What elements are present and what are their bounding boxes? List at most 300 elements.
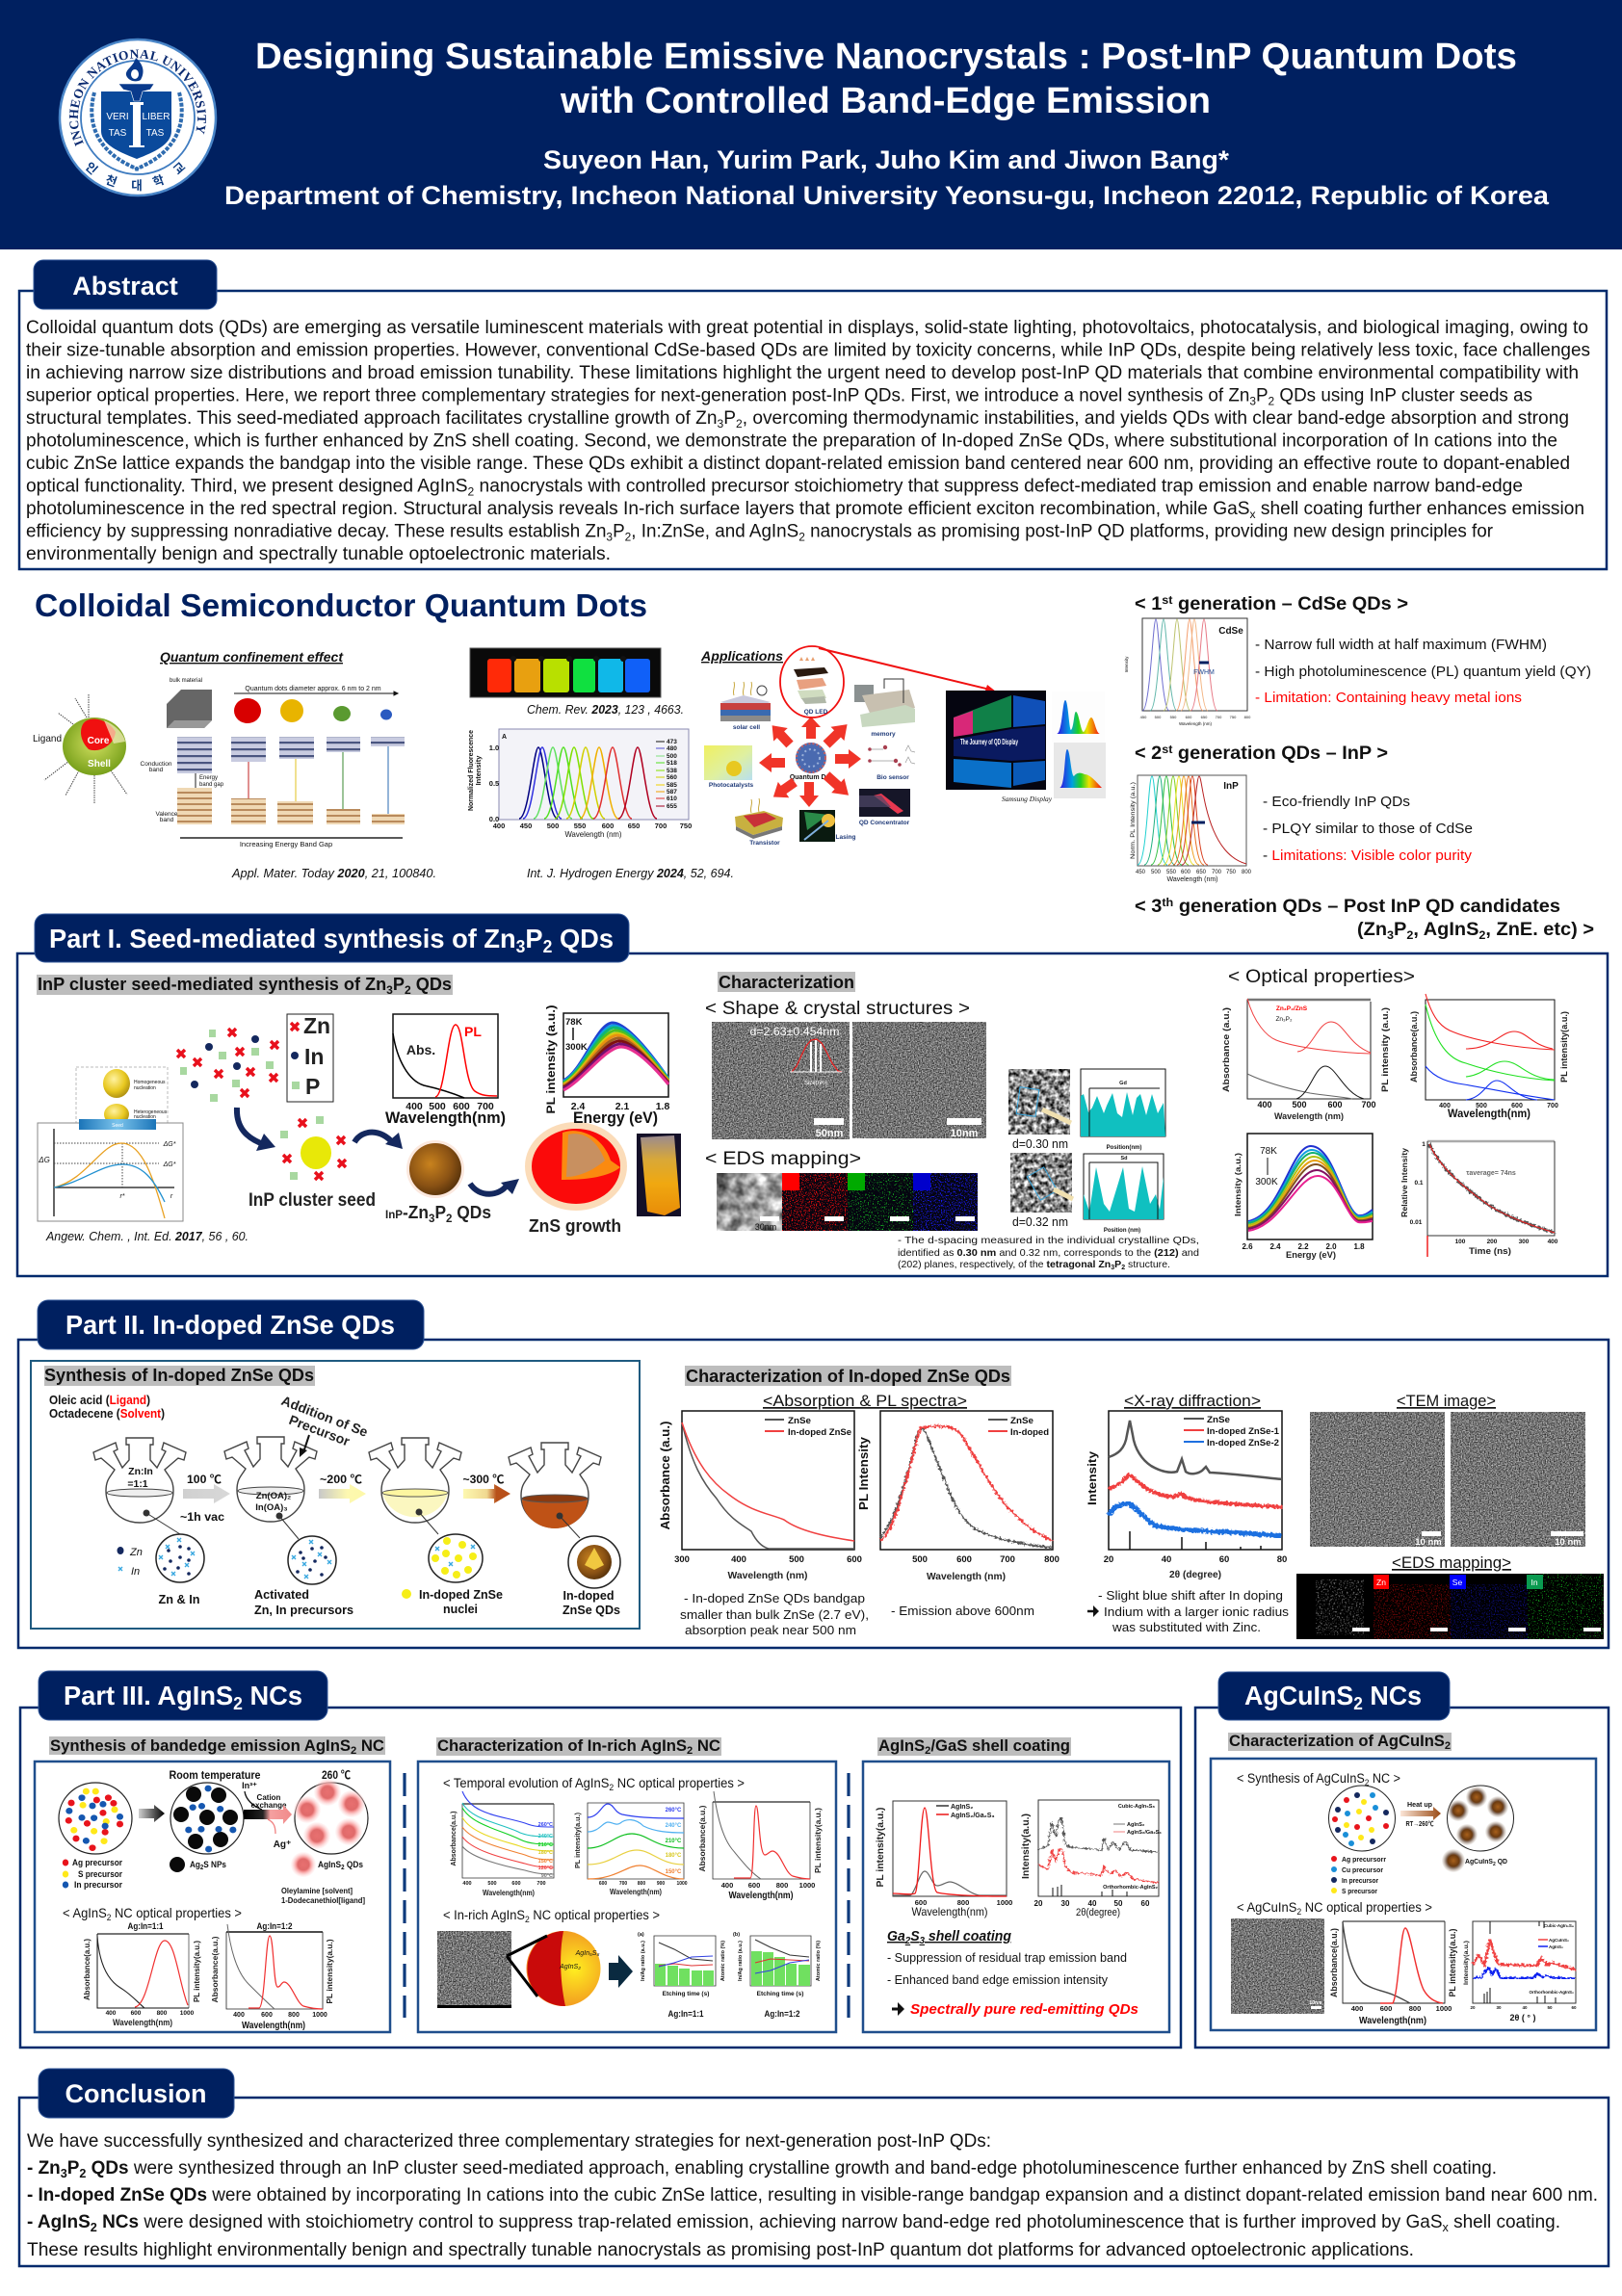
chart: normalized fluorescence spectra: 500 [547,822,559,830]
CdSe bullet points [1255,637,1591,706]
EDS maps [1296,1574,1604,1640]
chart: temporal absorbance: 210°C [538,1842,553,1848]
chart: normalized fluorescence spectra: 655 [667,803,677,810]
nucleation schematic [38,1067,183,1221]
application: QD concentrator: QD Concentrator [859,820,910,826]
chart: XRD [1086,1411,1287,1580]
optical properties heading: 2 [107,1913,111,1922]
In-rich heading: < In-rich AgInS [443,1908,529,1922]
d-spacing note: 2 [1121,1265,1125,1271]
chart: etching a: Atomic ratio (%) [720,1941,726,1981]
chart: AgInS2 abs and PL: PL intensity(a.u.) [813,1808,823,1873]
chart: XRD shell coating: Intensity(a.u.) [1021,1813,1032,1879]
chart: AgCuInS2 XRD: 40 [1522,2005,1528,2010]
conclusion heading: Conclusion [65,2079,206,2108]
abstract text: structural templates. This seed-mediated approach facilitates crystalline growth of Zn [26,408,712,429]
icon: university logo: 천 [104,173,118,190]
part III heading: NCs [243,1681,302,1710]
chart: absorption and PL [385,1014,506,1127]
chart: InP emission: InP [1223,781,1239,792]
2nd generation heading: < 2 [1135,744,1161,764]
chart: normalized fluorescence spectra: 585 [667,782,677,789]
panel: quantum dot generations [1124,593,1594,942]
chart: absorption and PL: 700 [477,1101,494,1112]
stage labels: Zn, In precursors [254,1604,353,1617]
AgInS2 QD circle: 260 ℃ [322,1768,351,1782]
panel: abstract [19,260,1607,569]
chart: temporal PL: Wavelength(nm) [610,1888,662,1896]
stage labels: nuclei [443,1603,478,1616]
chart: Zn3P2 absorption and PL: 500 [1292,1100,1307,1109]
chart: normalized fluorescence spectra: 0.0 [489,815,499,823]
EDS maps: 30nm [1352,1633,1370,1640]
chart: absorbance of ZnSe: Absorbance (a.u.) [659,1422,672,1529]
chart: Ag:In=1:1: PL intensity(a.u.) [192,1941,201,2002]
abstract heading: Abstract [72,272,178,300]
nucleation schematic: ΔG* [163,1161,176,1168]
3rd generation heading: (Zn [1357,920,1386,940]
synthesis heading: 3 [386,983,393,997]
chart: XRD shell coating: Orthorhombic-AgInS₂ [1103,1885,1159,1891]
chart: normalized fluorescence spectra: 450 [520,822,532,830]
chart: XRD shell coating [1021,1800,1162,1918]
chart: absorption and PL: Wavelength(nm) [385,1109,506,1127]
XRD caption [1087,1589,1289,1634]
chart: temporal PL: 1000 [676,1881,688,1887]
1st generation heading: generation – CdSe QDs > [1173,594,1408,614]
chart: PL of ZnSe: Wavelength (nm) [927,1571,1006,1582]
synthesis heading: 2 [1365,1778,1369,1787]
InP-Zn3P2 QD [385,1140,491,1225]
chart: Zn3P2 absorption and PL: Zn₃P₂/ZnS [1276,1005,1308,1012]
citation: Int. J. Hydrogen Energy 2024, 52, 694. [527,866,734,880]
TEM image 1: 10 nm [1415,1537,1442,1548]
stage labels [158,1588,620,1617]
stage labels: In-doped [562,1589,615,1603]
nucleation schematic: r [170,1193,173,1200]
chart: normalized fluorescence spectra: Normalized Fluorescence [466,730,475,811]
chart: XRD: 2θ (degree) [1169,1569,1221,1580]
chart: XRD: Intensity [1086,1451,1099,1505]
conclusion text: 2 [91,2220,97,2234]
icon: university logo: INCHEON NATIONAL UNIVERSITY [69,50,206,146]
icon: core-shell quantum dot with ligands: Shell [88,759,111,770]
InP bullet points: - Limitations: Visible color purity [1263,848,1473,864]
chart: AgCuInS2 XRD: 2θ ( ° ) [1510,2013,1535,2022]
quantum confinement diagram: Quantum confinement effect [160,649,344,665]
chart: RGB absorption and PL: 500 [1476,1103,1487,1109]
InP-Zn3P2 QD: 2 [446,1212,453,1225]
applications diagram: Applications [700,648,783,664]
chart: absorbance of ZnSe: Wavelength (nm) [728,1570,807,1581]
chart: temperature-dependent PL: 2.2 [1297,1242,1309,1251]
chart: AgCuInS2 XRD: 30 [1496,2005,1502,2010]
header banner [0,0,1622,249]
AgCuInS2 QD circle [1447,1786,1514,1851]
application: photocatalyst [704,745,753,789]
chart: RGB absorption and PL: PL intensity(a.u.) [1559,1011,1569,1083]
chart: temporal PL: 700 [619,1881,627,1887]
conclusion text: were designed with stoichiometry control to suppress trap-related emission, achieving narrow band-edge red photoluminescence that is further improved by GaS [144,2211,1478,2232]
chart: absorbance of ZnSe [659,1411,862,1581]
chart: temporal PL: 210°C [666,1839,682,1844]
chart: PL of ZnSe: ZnSe [1010,1416,1033,1426]
chart: Zn3P2 absorption and PL: 700 [1361,1100,1376,1109]
panel: synthesis of In-doped ZnSe QDs [31,1361,640,1629]
2nd generation heading: generation QDs – InP > [1172,744,1388,764]
chart: Ag:In=1:1: 800 [157,2010,168,2017]
legend: Cu precursor [1342,1866,1383,1874]
part II heading: Part II. In-doped ZnSe QDs [65,1310,395,1340]
chart: AgCuInS2 abs and PL: 600 [1380,2004,1392,2013]
panel: conclusion [19,2069,1609,2266]
chart: AgCuInS2 abs and PL [1329,1921,1457,2026]
HRTEM d-spacing 0.32 nm: Sd [1120,1156,1128,1161]
HRTEM d-spacing 0.32 nm [1010,1153,1164,1234]
chart: normalized fluorescence spectra: 480 [667,745,677,752]
chart: XRD shell coating: 20 [1034,1899,1043,1908]
TEM image 2: 10 nm [1555,1537,1582,1548]
particle model [507,1931,601,2006]
EDS mapping: Zn [827,1178,839,1188]
shell coating text: 2 [904,1936,911,1946]
chart: etching b: Atomic ratio (%) [816,1941,822,1981]
optical properties heading: < Optical properties> [1228,966,1415,987]
chart: Ag:In=1:2: 800 [288,2012,300,2019]
abstract text: photoluminescence in the red spectral region. Structural analysis reveals In-rich surface layers that promote efficient exciton recombination, while GaS [26,499,1242,519]
conclusion text [27,2130,1598,2260]
chart: temporal absorbance: 400 [462,1881,472,1887]
chart: XRD shell coating: 60 [1141,1899,1150,1908]
chart: RGB absorption and PL: 400 [1439,1103,1451,1109]
synthesis legend: 1-Dodecanethiol[ligand] [281,1895,365,1905]
chart: Ag:In=1:2: 1000 [312,2012,327,2019]
chart: PL decay [1400,1141,1558,1257]
chart: normalized fluorescence spectra: 538 [667,768,677,774]
chart: CdSe emission: 450 [1140,715,1147,719]
shell coating text: shell coating [925,1929,1011,1944]
InP-Zn3P2 QD: P [434,1203,446,1222]
abstract text [26,318,1590,564]
HRTEM d-spacing 0.30 nm [1008,1069,1165,1151]
chart: temporal absorbance: 90°C [541,1873,553,1879]
chart: temporal absorbance: 600 [511,1881,521,1887]
chart: normalized fluorescence spectra: 750 [680,822,692,830]
chart: AgCuInS2 abs and PL: 1000 [1436,2004,1452,2013]
chart: PL decay: 300 [1519,1239,1530,1245]
TEM image 50 nm [712,1022,850,1139]
icon: university logo: VERI [106,112,129,122]
chart: temperature PL: 2.4 [571,1101,585,1112]
icon: core-shell quantum dot with ligands: Core [88,736,110,746]
chart: etching b: Ag:In=1:2 [765,2009,799,2020]
chart: temporal absorbance: 700 [536,1881,546,1887]
optical properties heading: NC optical properties > [111,1905,242,1920]
chart: AgCuInS2 XRD: Orthorhombic-AgInS₂ [1530,1990,1574,1995]
application: photocatalyst: Photocatalysts [709,782,753,789]
TEM image 10 nm [852,1022,986,1139]
shell coating text: - Enhanced band edge emission intensity [887,1972,1108,1987]
chart: Ag:In=1:2: 600 [261,2012,273,2019]
chart: XRD: 60 [1219,1554,1229,1565]
panel: AgCuInS2 content [1211,1759,1596,2030]
temporal evolution heading: 2 [609,1783,614,1792]
chart: normalized fluorescence spectra: 0.5 [489,779,499,788]
chart: absorption and PL: PL [464,1024,482,1039]
chart: AgCuInS2 XRD: Cubic-AgIn₅S₈ [1544,1923,1574,1928]
conclusion text: These results highlight environmentally benign and spectrally tunable nanocrystals as promising post-InP quantum dot platforms for advanced optoelectronic applications. [27,2239,1414,2260]
cation exchange arrow [242,1781,292,1850]
HRTEM d-spacing 0.30 nm: Gd [1119,1081,1127,1086]
chart: normalized fluorescence spectra: Intensity [474,755,483,785]
quantum confinement diagram: Energy [199,775,218,781]
synthesis legend: Ag precursor [72,1858,122,1868]
application: memory: memory [871,731,896,738]
abstract text: 2 [736,417,743,430]
InP bullet points: - PLQY similar to those of CdSe [1263,821,1473,837]
chart: Zn3P2 absorption and PL: Wavelength (nm) [1274,1111,1344,1121]
chart: temperature-dependent PL: Energy (eV) [1286,1250,1336,1261]
EDS mapping: 30nm [953,1222,974,1232]
chart: Zn3P2 absorption and PL: PL intensity (a.u.) [1380,1007,1391,1092]
arrow [237,1108,266,1145]
optical heading: 2 [1296,1907,1301,1917]
chart: Ag:In=1:2: Absorbance(a.u.) [210,1936,220,2003]
chart: temperature PL: PL intensity (a.u.) [544,1005,558,1113]
nucleation schematic: Heterogeneous [134,1109,168,1115]
chart: InP emission: 500 [1151,870,1162,875]
chart: temporal absorbance: 240°C [538,1834,553,1839]
EDS mapping: P [969,1178,976,1188]
EDS maps: 30nm [1508,1633,1526,1640]
chart: temporal absorbance: 120°C [538,1866,553,1871]
heat up arrow: Heat up [1407,1802,1432,1809]
chart: AgCuInS2 abs and PL: Wavelength(nm) [1359,2016,1426,2026]
title: with Controlled Band-Edge Emission [560,81,1211,121]
EDS mapping [705,1148,978,1232]
chart: normalized fluorescence spectra: Wavelength (nm) [564,829,622,839]
chart: Ag:In=1:2: 400 [233,2012,245,2019]
part III heading [39,1671,327,1720]
EDS mapping: In [899,1178,906,1188]
chart: CdSe emission: FWHM [1193,669,1215,676]
flask 1: Zn:In [128,1466,153,1477]
d-spacing note: structure. [1125,1259,1170,1270]
3rd generation heading: < 3 [1135,897,1161,917]
chart: XRD: 20 [1104,1554,1113,1565]
chart: temperature-dependent PL: 78K [1260,1146,1277,1157]
EDS maps: 30nm [1583,1633,1600,1640]
chart: CdSe emission: CdSe [1218,626,1243,637]
abstract text: their size-tunable absorption and emission properties. However, conventional CdSe-based QDs are limited by toxicity concerns, while InP QDs, despite being relatively less toxic, face challenges [26,341,1590,360]
TEM image 50 nm: d=2.63±0.454nm [749,1025,840,1038]
application: memory [854,679,915,738]
icon: university logo: TAS [146,128,165,139]
chart: temporal PL: 260°C [666,1808,682,1813]
abstract text: in achieving narrow size distributions and broad emission tunability. These limitations highlight the urgent need to develop post-InP QD materials that combine environmental compatibility with [26,363,1579,383]
chart: temperature PL: 78K [565,1017,583,1028]
chart: PL shell coating: 800 [957,1898,969,1907]
abstract text: , In:ZnSe, and AgInS [631,522,798,541]
synthesis legend: Ag [190,1860,202,1870]
quantum confinement diagram: Valence [155,811,178,818]
chart: temporal absorbance [449,1791,554,1897]
application: solar cell [720,682,771,731]
nucleation schematic: ΔG* [163,1141,176,1148]
part I heading [35,914,629,962]
icon: university logo: TAS [109,128,127,139]
application: QD concentrator [859,789,910,826]
chart: temperature-dependent PL: 2.6 [1242,1242,1253,1251]
chart: PL decay: Relative Intensity [1400,1147,1409,1217]
chart: XRD: 40 [1162,1554,1171,1565]
InP-Zn3P2 QD: 3 [429,1212,435,1225]
abstract text: , overcoming thermodynamic instabilities, and yields QDs with clear band-edge absorption and strong [743,408,1569,429]
chart: InP emission: Norm. PL Intensity (a.u.) [1130,782,1137,859]
Se precursor addition: Precursor [287,1412,353,1449]
chart: RGB absorption and PL: Wavelength(nm) [1448,1109,1530,1120]
characterization heading: Characterization of In-doped ZnSe QDs [686,1367,1010,1386]
chart: RGB absorption and PL: 700 [1547,1103,1558,1109]
TEM heading: <TEM image> [1397,1392,1496,1410]
application: bio sensor [868,745,915,781]
chart: temperature PL: Energy (eV) [573,1109,658,1127]
chart: Ag:In=1:1: Ag:In=1:1 [127,1921,164,1932]
application: transistor [735,798,783,847]
abstract text: P [1256,385,1269,406]
chart: absorbance of ZnSe: 300 [674,1554,690,1565]
arrow [470,1184,507,1194]
panel: In-rich AgInS2 characterization [418,1761,836,2032]
3rd generation heading: th [1162,896,1173,909]
chart: AgInS2 abs and PL: 600 [748,1881,760,1890]
synthesis heading: NC [356,1737,384,1755]
shell coating heading [877,1737,1071,1757]
chart: XRD shell coating: 50 [1114,1899,1123,1908]
3rd generation heading: P [1394,920,1407,940]
arrow: 100 C [180,1473,230,1524]
synthesis legend: AgInS [318,1860,344,1870]
chart: Zn3P2 absorption and PL: 400 [1257,1100,1272,1109]
synthesis legend: Oleylamine [solvent] [281,1886,353,1895]
absorption caption: absorption peak near 500 nm [685,1624,856,1637]
abstract text: 3 [717,417,724,430]
chart: Ag:In=1:2: Wavelength(nm) [242,2021,305,2031]
panel: AgCuInS2 NCs [1195,1672,1609,2048]
chart: temporal absorbance: 180°C [538,1850,553,1856]
chart: etching a [638,1932,726,2020]
chart: etching b [733,1932,822,2020]
chart: XRD shell coating: AgInS₂ [1127,1822,1145,1828]
chart: Ag:In=1:1: 600 [131,2010,142,2017]
chart: PL shell coating: AgInS₂ [951,1804,973,1811]
part III heading: Part III. AgInS [64,1681,238,1710]
chart: Zn3P2 absorption and PL: 600 [1327,1100,1343,1109]
TEM image 2 [1451,1412,1585,1548]
d-spacing note: identified as 0.30 nm and 0.32 nm, corresponds to the (212) and [898,1247,1199,1259]
EDS mapping: 30nm [889,1222,910,1232]
flask 2: In(OA)₃ [255,1502,288,1513]
QD display photo [946,691,1053,803]
legend: Zn In P: Zn [303,1013,330,1038]
conclusion heading [39,2069,234,2118]
legend: Zn In P: P [305,1074,320,1099]
citation: Appl. Mater. Today 2020, 21, 100840. [231,866,436,880]
Ag2S NP circle [170,1768,261,1854]
cation exchange arrow: In³⁺ [242,1781,257,1790]
XRD caption: Indium with a larger ionic radius [1104,1605,1289,1619]
chart: absorption and PL: 600 [453,1101,470,1112]
conclusion text: - Zn [27,2157,61,2179]
icon: core-shell quantum dot with ligands [33,693,127,804]
chart: temperature PL [544,1005,669,1127]
panel: shell coating [863,1761,1169,2032]
InP bullet points: - Eco-friendly InP QDs [1263,794,1410,810]
chart: PL shell coating: 1000 [997,1898,1012,1907]
abstract heading [34,260,217,309]
nucleation schematic: r* [119,1193,125,1200]
chart: InP emission: 600 [1181,870,1191,875]
flask 3 [369,1438,483,1582]
cation exchange arrow: Cation [257,1793,281,1802]
chart: normalized fluorescence spectra: 400 [493,822,505,830]
conclusion text: were synthesized through an InP cluster seed-mediated approach, enabling crystalline growth and band-edge photoluminescence further enhanced by ZnS shell coating. [134,2157,1538,2179]
conclusion text: - In-doped ZnSe QDs were obtained by incorporating In cations into the cubic ZnSe lattice, resulting in visible-range bandgap expansion and a distinct dopant-related emission band near 600 nm. [27,2184,1598,2205]
icon: university logo: LIBER [143,112,170,122]
3rd generation heading: 2 [1478,928,1486,942]
shell coating text: S [910,1929,920,1944]
chart: RGB absorption and PL: 600 [1511,1103,1523,1109]
icon: core-shell quantum dot with ligands: Ligand [33,733,62,744]
synthesis legend: QDs [345,1860,363,1870]
quantum confinement diagram: band [160,817,174,823]
chart: temperature PL: 1.8 [656,1101,669,1112]
icon: university logo: 교 [170,160,188,177]
synthesis legend: S precursor [78,1869,122,1880]
title: Designing Sustainable Emissive Nanocrystals : Post-InP Quantum Dots [255,37,1517,77]
chart: AgInS2 abs and PL: 400 [721,1881,733,1890]
chart: normalized fluorescence spectra: A [502,734,507,741]
chart: temperature-dependent PL: 1.8 [1353,1242,1365,1251]
abstract text: shell coating further enhances emission [1256,499,1584,519]
legend Zn In: In [131,1566,140,1578]
legend: Zn In P: In [304,1044,324,1069]
chart: PL shell coating: 600 [915,1898,927,1907]
optical heading: < AgCuInS [1237,1900,1299,1915]
application: transistor: Transistor [749,840,780,847]
particle model: AgIn₅S₈ [575,1950,599,1957]
divider: dashed line 1 [403,1773,406,2018]
AgCuInS2 heading: 2 [1353,1694,1363,1713]
chart: temperature-dependent PL: 300K [1255,1177,1278,1187]
abstract text: nanocrystals with controlled precursor stoichiometry that suppress defect-mediated trap emission and enable narrow band-edge [474,476,1523,497]
CdSe bullet points: - High photoluminescence (PL) quantum yield (QY) [1255,664,1591,680]
legend: 2 [1493,1862,1496,1867]
flask 1: =1:1 [127,1478,148,1490]
icon: university logo: 대 [131,179,143,193]
divider: dashed line 2 [847,1773,850,2018]
chart: XRD shell coating: Cubic-AgIn₅S₈ [1118,1804,1155,1810]
chart: Zn3P2 absorption and PL [1221,999,1391,1121]
part I heading: 3 [516,937,525,956]
chart: Ag:In=1:1: 1000 [180,2010,195,2017]
chart: Ag:In=1:2 [210,1921,334,2031]
abstract text: P [613,522,625,541]
chart: normalized fluorescence spectra: 650 [628,822,640,830]
flask 1 [93,1438,204,1582]
chart: PL decay: 1 [1422,1141,1426,1148]
chart: CdSe emission: 600 [1186,715,1192,719]
